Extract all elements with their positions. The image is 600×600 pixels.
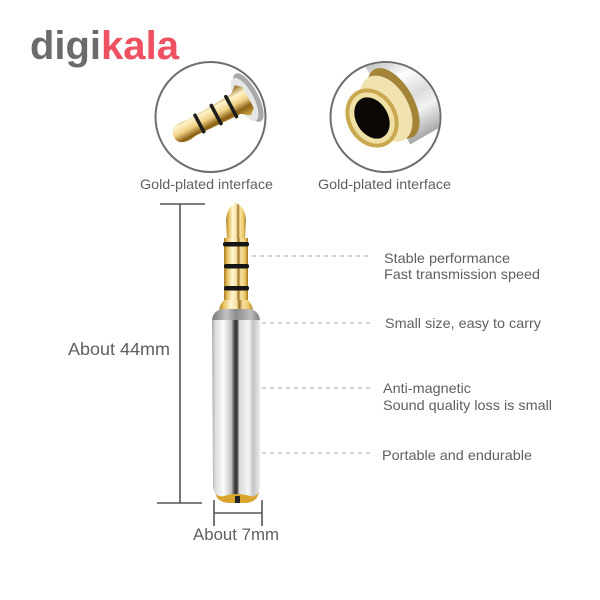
plug shaft <box>224 238 248 304</box>
callout: stable performance: Fast transmission speed <box>384 266 540 282</box>
plug tip <box>226 203 246 238</box>
circle callout: gold-plated plug <box>156 62 270 172</box>
width dimension bracket <box>214 500 262 526</box>
silver body <box>212 320 260 496</box>
metal collar <box>212 309 260 322</box>
callout: stable performance <box>252 250 540 282</box>
logo: digikala: kala <box>101 24 180 68</box>
callout: stable performance: Stable performance <box>384 250 510 266</box>
height dimension bracket <box>157 204 205 503</box>
insulating rings <box>223 242 249 290</box>
callout: anti-magnetic <box>262 380 552 413</box>
label: about 7mm: About 7mm <box>193 525 279 544</box>
callout: anti-magnetic: Anti-magnetic <box>383 380 471 396</box>
logo: digikala: digi <box>30 24 101 68</box>
circle callout: gold-plated socket <box>330 61 442 173</box>
gold flange <box>219 300 253 312</box>
icon: plug close-up <box>161 69 270 161</box>
logo: digikala <box>30 24 180 68</box>
icon: socket close-up <box>345 63 440 148</box>
main adapter product <box>212 203 260 503</box>
caption: right gold-plated interface: Gold-plated interface <box>318 176 451 192</box>
caption: left gold-plated interface: Gold-plated interface <box>140 176 273 192</box>
callout: small size: Small size, easy to carry <box>385 315 541 331</box>
callout: portable and endurable: Portable and endurable <box>382 447 532 463</box>
gold base <box>215 488 259 503</box>
dark base notch <box>235 496 240 503</box>
callout: anti-magnetic: Sound quality loss is small <box>383 397 552 413</box>
label: about 44mm: About 44mm <box>68 339 170 359</box>
